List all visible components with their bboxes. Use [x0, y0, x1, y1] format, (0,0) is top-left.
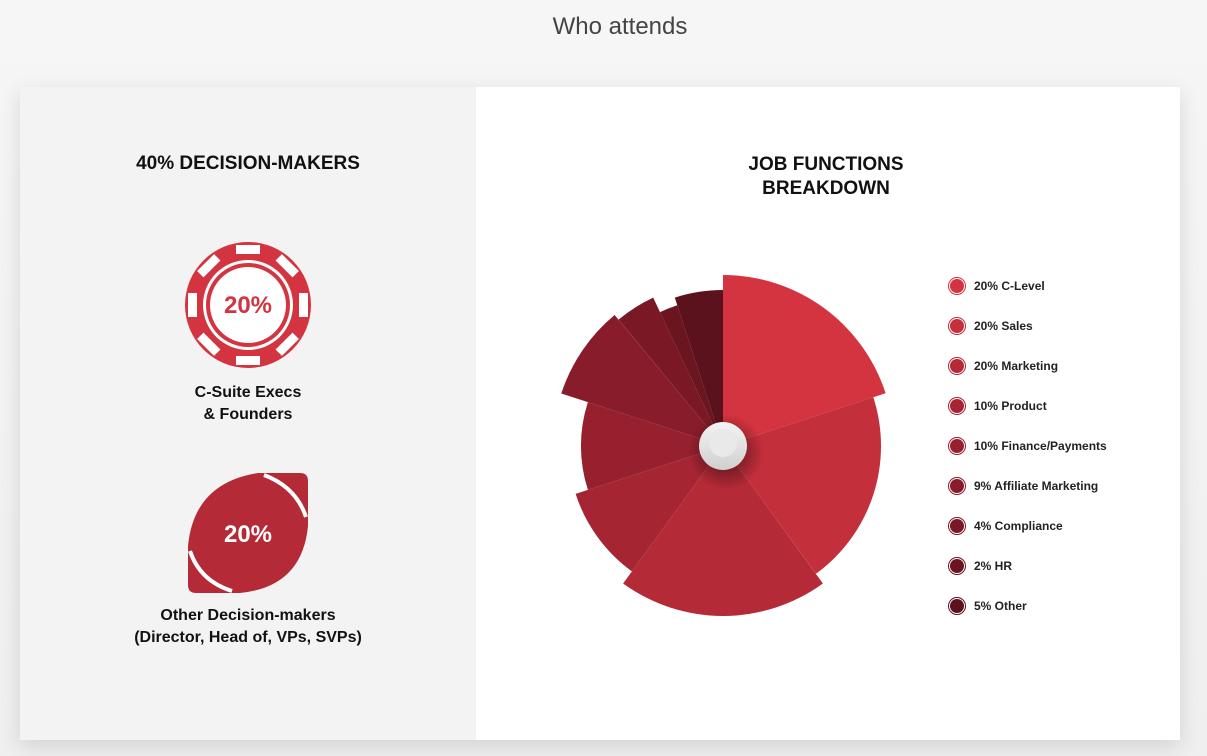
title: Who attends [553, 13, 687, 40]
legend: 10% Finance/Payments [974, 439, 1107, 453]
icon: poker chip [185, 242, 311, 368]
legend: 20% Sales [974, 319, 1033, 333]
label: c-suite: & Founders [204, 406, 292, 423]
label: other decision makers: Other Decision-makers [160, 607, 336, 624]
label: other decision makers: (Director, Head of, VPs, SVPs) [134, 629, 362, 646]
icon: center knob [688, 414, 764, 490]
legend [948, 277, 1107, 615]
legend: 10% Product [974, 399, 1047, 413]
icon: football: 20% [224, 521, 272, 548]
icon: poker chip: 20% [224, 292, 272, 319]
panel: job functions [748, 154, 904, 199]
heading: job functions [748, 154, 904, 199]
label: other decision makers [134, 607, 362, 646]
legend: 2% HR [974, 559, 1012, 573]
heading: decision makers: 40% DECISION-MAKERS [136, 153, 360, 174]
legend: 5% Other [974, 599, 1027, 613]
panel: decision makers [20, 87, 476, 740]
heading: job functions: JOB FUNCTIONS [748, 154, 904, 175]
label: c-suite: C-Suite Execs [195, 384, 301, 401]
label: c-suite [195, 384, 301, 423]
legend: 20% C-Level [974, 279, 1045, 293]
legend: 4% Compliance [974, 519, 1063, 533]
heading: job functions: BREAKDOWN [762, 178, 890, 199]
legend: 20% Marketing [974, 359, 1058, 373]
legend: 9% Affiliate Marketing [974, 479, 1098, 493]
icon: football [188, 473, 308, 593]
